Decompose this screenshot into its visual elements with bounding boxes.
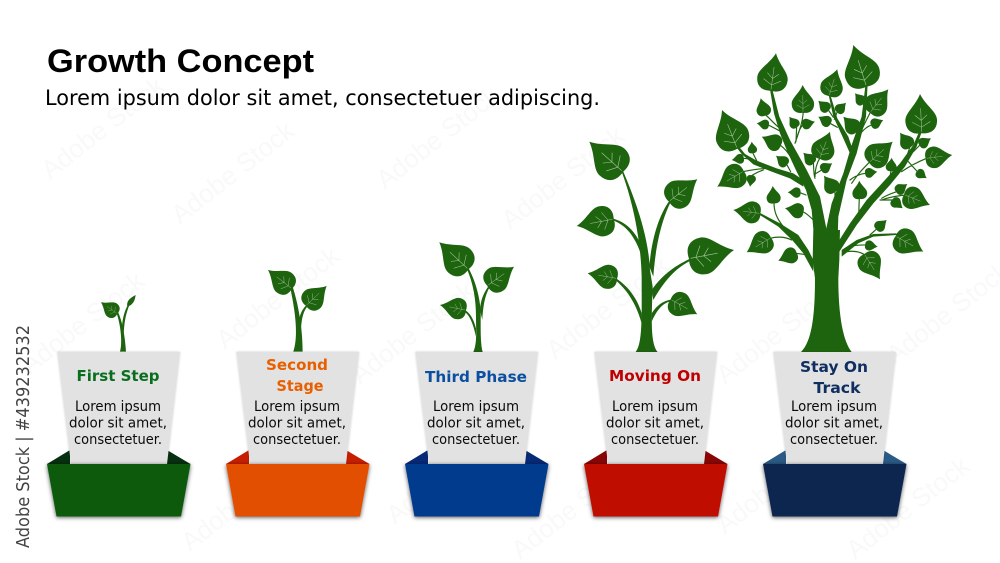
plant: seedling 3: [428, 231, 522, 352]
body text: stay on track: Lorem ipsum: [791, 399, 877, 415]
watermark: Adobe Stock: [495, 120, 631, 235]
body text: third phase: Lorem ipsum: [433, 399, 519, 415]
watermark: Adobe Stock: [540, 250, 676, 365]
heading: stay on track: Stay On: [800, 358, 868, 376]
plant: seedling 1: [96, 295, 136, 352]
heading: stay on track: Track: [814, 379, 862, 397]
body text: first step: [69, 399, 167, 448]
body text: first step: consectetuer.: [74, 432, 162, 448]
watermark: Adobe Stock: [840, 450, 976, 563]
panel: third phase pot: [405, 352, 548, 516]
body text: third phase: [427, 399, 525, 448]
plant: seedling 2: [260, 260, 335, 352]
watermark: Adobe Stock: [210, 240, 346, 355]
body text: moving on: dolor sit amet,: [606, 416, 704, 432]
watermark: Adobe Stock: [505, 450, 641, 563]
subtitle: Lorem ipsum dolor sit amet, consectetuer adipiscing.: [45, 86, 600, 110]
watermark: Adobe Stock: [165, 115, 301, 230]
body text: stay on track: dolor sit amet,: [785, 416, 883, 432]
body text: moving on: Lorem ipsum: [612, 399, 698, 415]
heading: third phase: Third Phase: [425, 368, 527, 386]
stock id vertical caption: Adobe Stock | #439232532: [13, 325, 34, 548]
body text: moving on: [606, 399, 704, 448]
body text: stay on track: consectetuer.: [790, 432, 878, 448]
watermark: Adobe Stock: [370, 80, 506, 195]
plant: sapling 4: [574, 128, 737, 352]
body text: second stage: [248, 399, 346, 448]
watermark: Adobe Stock: [35, 70, 171, 185]
heading: stay on track: [800, 358, 868, 397]
body text: second stage: Lorem ipsum: [254, 399, 340, 415]
panel: stay on track pot: [763, 352, 906, 516]
heading: second stage: Second: [266, 356, 328, 374]
body text: first step: Lorem ipsum: [75, 399, 161, 415]
watermark: Adobe Stock: [710, 275, 846, 390]
body text: third phase: consectetuer.: [432, 432, 520, 448]
panel: second stage pot: [226, 352, 370, 516]
body text: moving on: consectetuer.: [611, 432, 699, 448]
panel: moving on pot: [584, 352, 728, 516]
heading: first step: First Step: [76, 367, 160, 385]
heading: moving on: Moving On: [609, 367, 701, 385]
body text: stay on track: [785, 399, 883, 448]
watermark: Adobe Stock: [15, 265, 151, 380]
title: Growth Concept: [47, 43, 314, 79]
watermark: Adobe Stock: [175, 442, 311, 557]
panel: first step pot: [47, 352, 190, 516]
watermark: Adobe Stock: [710, 425, 846, 540]
heading: second stage: Stage: [276, 377, 324, 395]
body text: second stage: dolor sit amet,: [248, 416, 346, 432]
plant: full tree 5: [706, 40, 954, 352]
body text: second stage: consectetuer.: [253, 432, 341, 448]
body text: third phase: dolor sit amet,: [427, 416, 525, 432]
watermark: Adobe Stock: [345, 275, 481, 390]
body text: first step: dolor sit amet,: [69, 416, 167, 432]
heading: second stage: [266, 356, 328, 395]
watermark: Adobe Stock: [380, 415, 516, 530]
